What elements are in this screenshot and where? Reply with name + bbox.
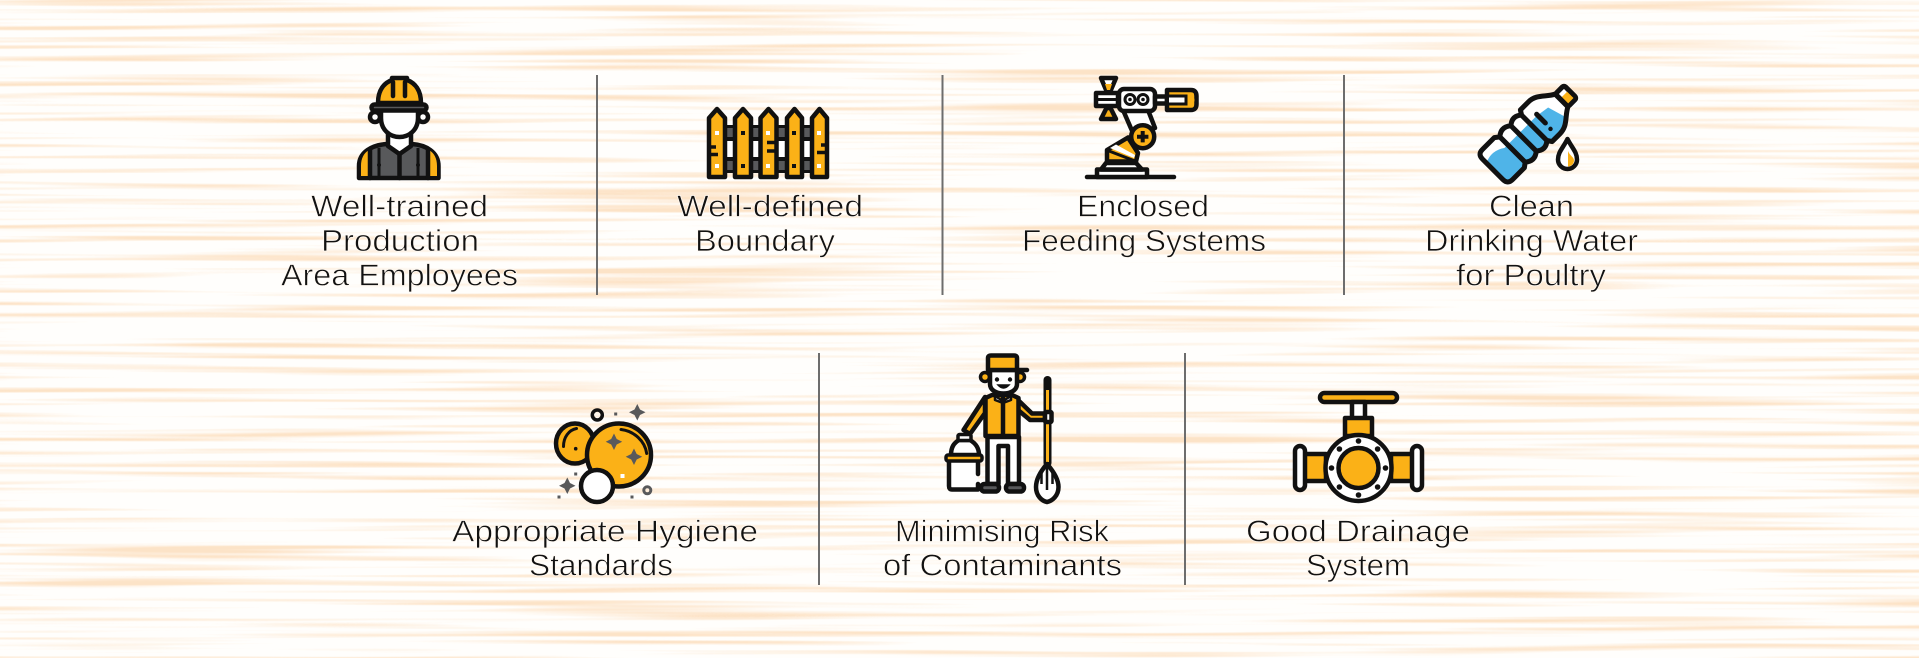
panel: minimising risk of contaminants	[883, 356, 1122, 582]
panel: well-trained employees	[281, 78, 518, 292]
label: well-trained employees	[281, 188, 518, 292]
label: well-trained employees: Production	[321, 223, 479, 258]
label: clean drinking water: Clean	[1489, 188, 1574, 224]
icon: worker with hard hat	[359, 78, 438, 178]
icon: water bottle with drop	[1477, 76, 1586, 185]
label: well-defined boundary: Well-defined	[677, 188, 863, 224]
label: well-defined boundary	[677, 188, 863, 258]
label: appropriate hygiene standards: Standards	[529, 548, 673, 582]
label: well-defined boundary: Boundary	[695, 223, 836, 258]
panel: good drainage system	[1246, 393, 1470, 582]
icon: robotic arm	[1087, 78, 1196, 177]
label: clean drinking water	[1425, 188, 1638, 292]
label: well-trained employees: Area Employees	[281, 258, 518, 292]
label: minimising risk of contaminants: Minimising Risk	[895, 514, 1109, 548]
label: good drainage system: Good Drainage	[1246, 514, 1470, 548]
label: enclosed feeding systems	[1022, 188, 1266, 258]
icon: soap bubbles	[556, 404, 651, 502]
icon: wooden fence	[709, 109, 827, 177]
panel: appropriate hygiene standards	[452, 404, 758, 582]
icon: pipe valve	[1295, 393, 1422, 501]
label: well-trained employees: Well-trained	[311, 188, 488, 224]
label: appropriate hygiene standards: Appropriate Hygiene	[452, 514, 758, 548]
label: minimising risk of contaminants: of Contaminants	[883, 548, 1122, 582]
label: clean drinking water: for Poultry	[1456, 258, 1607, 292]
panel: enclosed feeding systems	[1022, 78, 1266, 258]
label: good drainage system	[1246, 514, 1470, 582]
icon: farmer with bucket and shovel	[946, 356, 1058, 502]
label: enclosed feeding systems: Enclosed	[1077, 188, 1209, 224]
label: appropriate hygiene standards	[452, 514, 758, 582]
label: minimising risk of contaminants	[883, 514, 1122, 582]
label: good drainage system: System	[1306, 548, 1410, 582]
panel: clean drinking water	[1425, 76, 1638, 292]
panel: well-defined boundary	[677, 109, 863, 258]
label: enclosed feeding systems: Feeding Systems	[1022, 223, 1266, 258]
label: clean drinking water: Drinking Water	[1425, 223, 1638, 258]
